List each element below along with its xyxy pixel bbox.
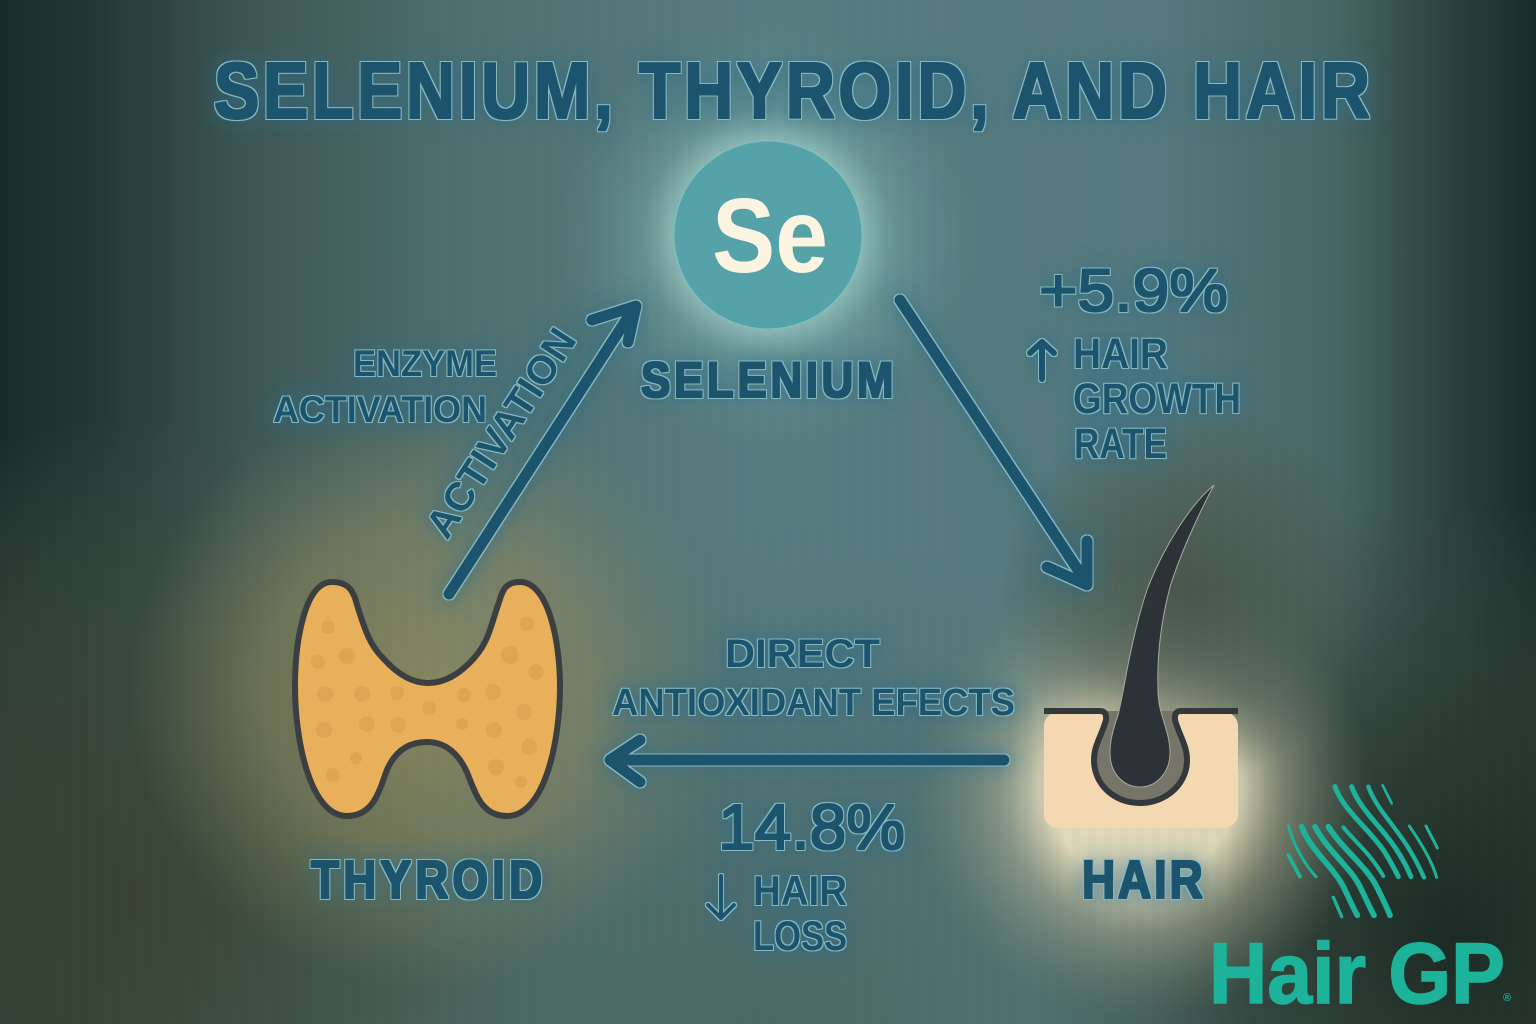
stat: hair growth rate [1030,257,1241,468]
selenium node [641,141,894,408]
stat label: LOSS [753,912,847,959]
enzyme activation label [273,343,497,430]
icon: selenium circle [674,141,862,329]
thyroid label: THYROID [311,850,542,910]
icon: logo strands [1288,785,1437,917]
arrow: thyroid to selenium [449,306,636,594]
rotated activation label: ACTIVATION [418,321,585,546]
arrow: hair to thyroid [610,740,1004,782]
thyroid node [295,582,560,910]
registered mark: ® [1503,992,1511,1004]
stat label [753,867,847,959]
enzyme activation label: ENZYME [353,343,497,384]
stat label: HAIR [1073,330,1168,378]
enzyme activation label: ACTIVATION [273,389,487,430]
direct antioxidant effects label: DIRECT [725,632,880,676]
icon: selenium circle: Se [712,177,828,295]
logo wordmark: Hair GP [1209,926,1505,1022]
stat: hair loss [708,791,905,959]
icon: down arrow [708,876,734,918]
logo: Hair GP [1209,785,1511,1022]
hair node [1044,485,1238,910]
stat value: +5.9% [1039,257,1228,324]
icon: thyroid gland [295,582,560,816]
direct antioxidant effects label [612,632,1015,724]
icon: up arrow [1030,342,1054,379]
hair label: HAIR [1082,850,1203,910]
stat label: HAIR [753,867,847,914]
title: SELENIUM, THYROID, AND HAIR [214,46,1370,135]
arrow: selenium to hair [900,300,1087,585]
stat label: RATE [1074,420,1167,468]
stat value: 14.8% [718,791,905,863]
direct antioxidant effects label: ANTIOXIDANT EFECTS [612,682,1015,724]
stat label [1073,330,1241,468]
icon: hair follicle [1044,485,1238,828]
stat label: GROWTH [1073,375,1241,423]
selenium label: SELENIUM [641,351,894,408]
